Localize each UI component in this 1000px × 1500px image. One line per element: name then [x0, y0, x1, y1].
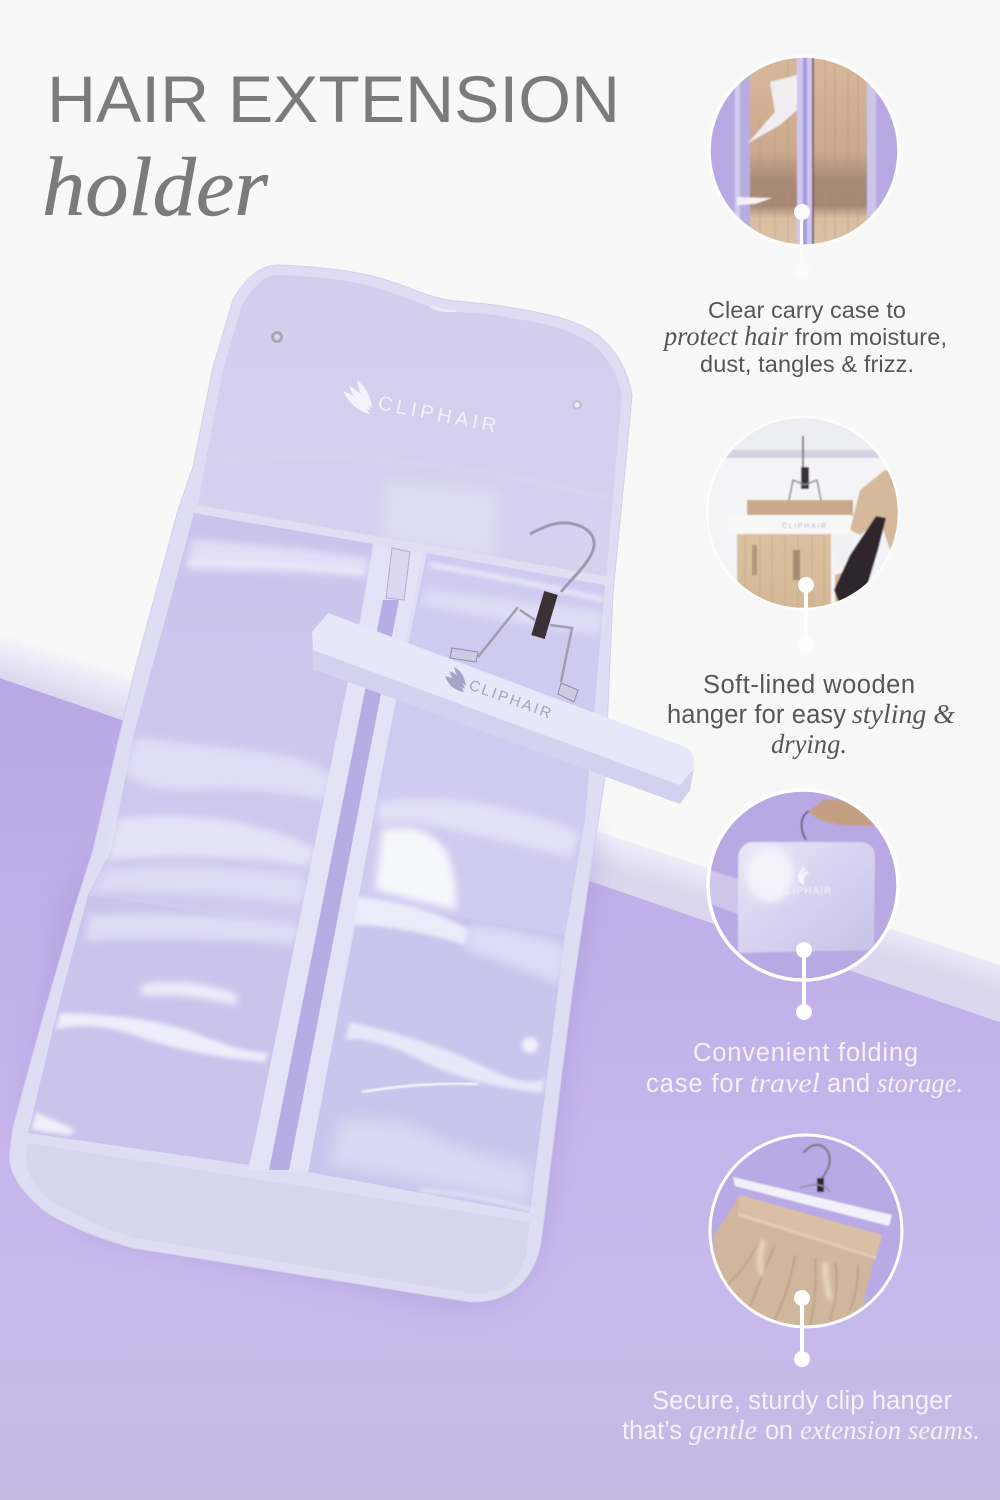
zipper teeth: [269, 600, 399, 1170]
caption: [646, 1039, 963, 1098]
photo: clear case with hair: [710, 58, 898, 244]
caption: protect hair: [662, 321, 788, 351]
feature 2: wooden hanger: [667, 410, 955, 759]
caption: travel: [750, 1068, 820, 1098]
hanger bar: [312, 613, 694, 804]
caption: on: [765, 1417, 793, 1445]
caption: storage.: [877, 1068, 963, 1098]
flap logo: CLIPHAIR: [376, 392, 498, 437]
photo: folded pouch held by hand: CLIPHAIR: [778, 886, 832, 897]
ring: [710, 1135, 902, 1327]
flap logo: [343, 380, 498, 437]
caption: Soft-lined wooden: [703, 671, 915, 699]
caption: [662, 297, 947, 377]
flap soft sheen: [380, 480, 500, 560]
feature 4: clip hanger: [622, 1130, 980, 1445]
ring: [708, 790, 898, 980]
ring: [709, 56, 899, 246]
flap crease highlight: [430, 306, 456, 311]
pocket sheens: [32, 540, 604, 1210]
caption: and: [827, 1070, 870, 1098]
photo: hanger with hair and styler: CLIPHAIR: [782, 523, 826, 530]
flap hem: [194, 505, 610, 590]
case body: [9, 265, 632, 1302]
pocket: upper right: [355, 553, 605, 935]
hanger hook and clip: [450, 523, 594, 702]
connector: [794, 204, 810, 279]
caption: styling &: [852, 699, 955, 729]
connector: [796, 942, 812, 1020]
top flap: [197, 275, 622, 582]
bottom band: [26, 1143, 530, 1293]
title: HAIR EXTENSION: [47, 62, 620, 136]
pocket: lower left: [28, 895, 305, 1165]
caption: [622, 1387, 980, 1445]
case shadow: [20, 800, 600, 1312]
caption: drying.: [771, 729, 847, 759]
caption: hanger for easy: [667, 701, 846, 729]
photo: hanger with hair and styler: [726, 418, 898, 608]
caption: Clear carry case to: [708, 297, 906, 323]
title: [42, 62, 620, 234]
caption: [667, 671, 955, 759]
photo: folded pouch held by hand: [710, 792, 896, 978]
caption: extension seams.: [800, 1415, 980, 1445]
caption: from moisture,: [795, 324, 947, 350]
ring: [707, 417, 899, 609]
pocket: upper left: [88, 513, 373, 930]
snap buttons: [271, 331, 582, 410]
connector: [794, 1290, 810, 1367]
pocket: lower right: [308, 900, 565, 1213]
caption: case for: [646, 1070, 744, 1098]
feature 3: folding case: [646, 780, 963, 1098]
caption: Secure, sturdy clip hanger: [652, 1387, 952, 1415]
feature 1: clear carry case: [662, 50, 947, 377]
hanger logo: [445, 667, 553, 722]
hanger logo: CLIPHAIR: [467, 677, 553, 722]
photo: hair on clip hanger: [712, 1136, 900, 1326]
caption: Convenient folding: [693, 1039, 918, 1067]
caption: gentle: [689, 1415, 757, 1445]
flap fold highlight: [200, 458, 615, 500]
caption: dust, tangles & frizz.: [700, 351, 914, 377]
product: lavender hanging case: [9, 265, 694, 1312]
caption: that’s: [622, 1417, 682, 1445]
zipper pull: [386, 548, 410, 600]
title: holder: [42, 141, 268, 234]
zipper tape: [249, 547, 422, 1172]
connector: [798, 577, 814, 653]
